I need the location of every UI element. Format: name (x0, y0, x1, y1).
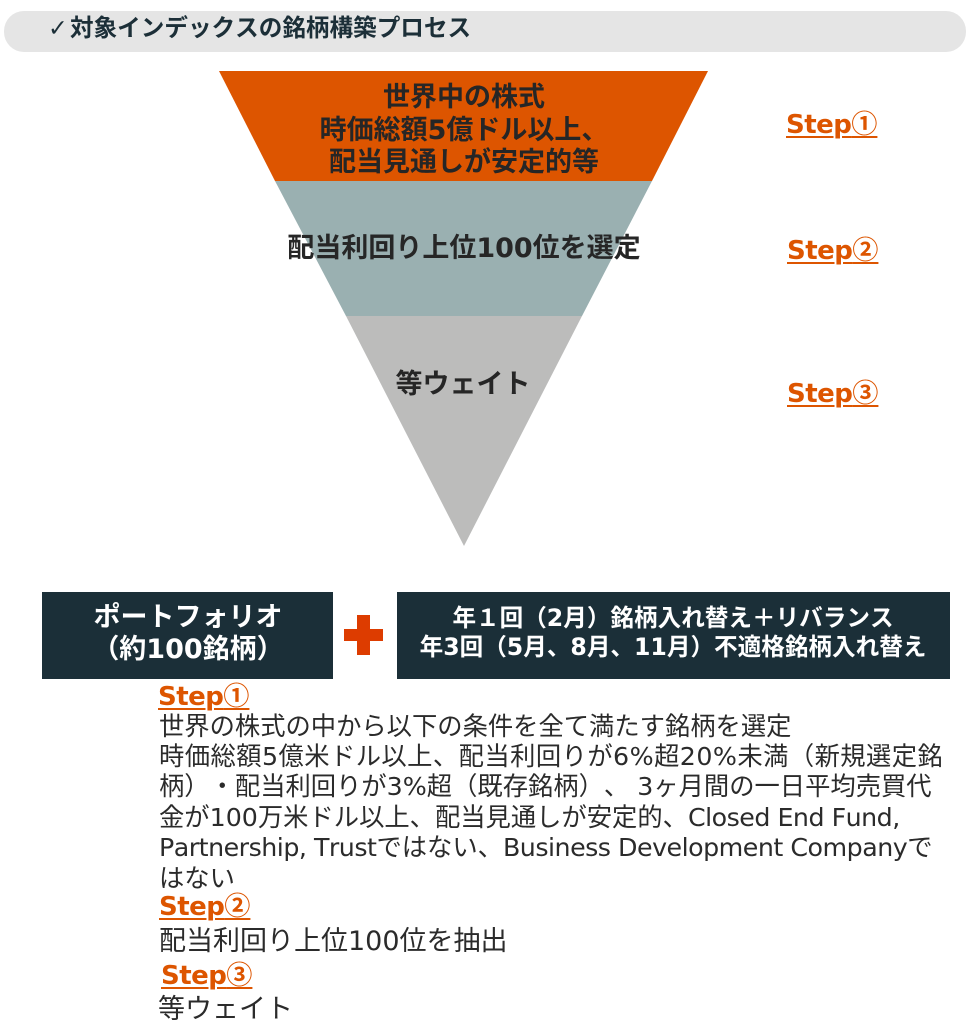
funnel text 2: 配当利回り上位100位を選定 (287, 233, 641, 264)
funnel text 3: 等ウェイト (396, 369, 530, 400)
step 1 description (158, 676, 943, 893)
step 1 heading: Step① (158, 676, 249, 713)
rebalance text (420, 604, 926, 661)
step 3 heading: Step③ (161, 955, 252, 992)
step 1 description: 時価総額5億米ドル以上、配当利回りが6%超20%未満（新規選定銘 (159, 742, 943, 771)
step 1 description: はない (159, 864, 235, 893)
step 2 heading: Step② (159, 886, 250, 923)
step 3 description (158, 955, 293, 1024)
rebalance box (397, 592, 950, 679)
portfolio box (42, 592, 333, 679)
step 1 description: 柄）・配当利回りが3%超（既存銘柄）、 3ヶ月間の一日平均売買代 (159, 772, 932, 801)
step 1 description: 金が100万米ドル以上、配当見通しが安定的、Closed End Fund, (159, 803, 900, 832)
icon: plus (344, 615, 383, 655)
funnel text 1 (320, 82, 608, 178)
rebalance text: 年１回（2月）銘柄入れ替え＋リバランス (452, 604, 894, 632)
step 2 description (159, 886, 508, 957)
funnel tier 3 (346, 316, 582, 546)
funnel text 1: 時価総額5億ドル以上、 (320, 115, 608, 146)
title bar (4, 11, 966, 52)
portfolio text (92, 602, 284, 665)
funnel text 1: 世界中の株式 (383, 82, 545, 113)
step label 2: Step② (787, 230, 878, 267)
title text: 対象インデックスの銘柄構築プロセス (70, 14, 471, 42)
funnel tier 1 (219, 71, 708, 181)
funnel text 1: 配当見通しが安定的等 (329, 147, 599, 178)
funnel tier 2 (275, 181, 652, 316)
step 2 body text: 配当利回り上位100位を抽出 (159, 926, 508, 957)
portfolio text: ポートフォリオ (94, 602, 282, 633)
step label 1: Step① (786, 104, 877, 141)
step 1 body text: 世界の株式の中から以下の条件を全て満たす銘柄を選定 (159, 712, 791, 741)
portfolio text: （約100銘柄） (92, 634, 284, 665)
step label 3: Step③ (787, 373, 878, 410)
rebalance text: 年3回（5月、8月、11月）不適格銘柄入れ替え (420, 633, 926, 661)
step 1 description: Partnership, Trustではない、Business Development Companyで (159, 833, 933, 862)
funnel diagram (219, 71, 708, 546)
title text: ✓ (48, 14, 68, 42)
